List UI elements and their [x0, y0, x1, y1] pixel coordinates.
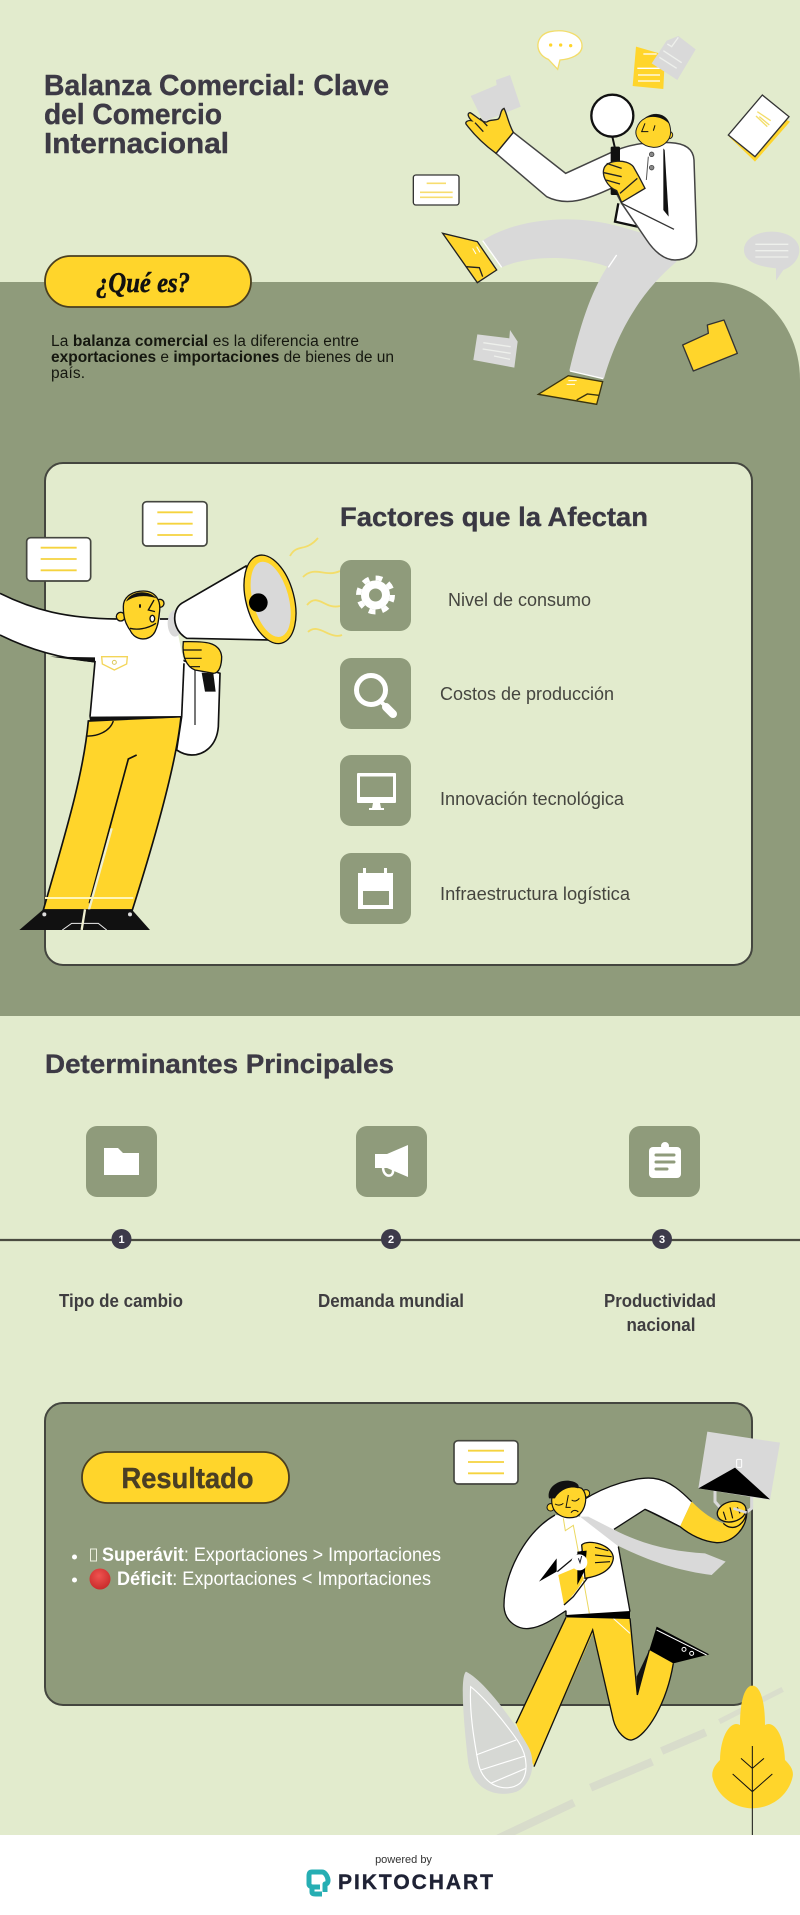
label: infraestructura: Infraestructura logística [440, 884, 631, 904]
label: costos: Costos de producción [440, 684, 614, 704]
timeline line [0, 1239, 800, 1241]
notes yellow and grey [633, 36, 696, 89]
grey shoe [463, 1672, 532, 1794]
background band [0, 282, 800, 1016]
message card [454, 1441, 518, 1484]
title: del Comercio [44, 99, 222, 131]
marker 2: 2 [388, 1234, 394, 1246]
grey speech bubble [744, 232, 799, 281]
marker 1 [112, 1229, 132, 1249]
sleeve [177, 660, 220, 755]
tie [580, 1517, 726, 1575]
forearm and watch [539, 1542, 613, 1605]
heading: determinantes: Determinantes Principales [45, 1049, 394, 1079]
illustration: man with magnifying glass [413, 31, 799, 404]
shirt pocket [102, 657, 127, 670]
panel: resultado [45, 1403, 752, 1705]
label: innovacion: Innovación tecnológica [440, 789, 625, 809]
definition text: La balanza comercial es la diferencia entre [51, 333, 359, 350]
icon: magnifier [340, 658, 411, 729]
megaphone [168, 549, 305, 649]
bullet: superavit: Superávit: Exportaciones > Importaciones [102, 1545, 441, 1566]
yellow folder [683, 320, 737, 371]
icon: folder [86, 1126, 157, 1197]
illustration: man with megaphone [0, 502, 305, 930]
label 3 [604, 1291, 716, 1335]
magnifying glass [591, 95, 633, 195]
black shoe [649, 1627, 709, 1663]
raised hand [466, 108, 513, 153]
head [636, 114, 673, 147]
pants [43, 717, 181, 930]
front shoe [538, 376, 603, 404]
illustration: running man [454, 1432, 793, 1838]
title: Internacional [44, 128, 229, 160]
heading: factores: Factores que la Afectan [340, 502, 648, 532]
icon: megaphone [356, 1126, 427, 1197]
label 3: Productividad [604, 1291, 716, 1311]
footer [0, 1835, 800, 1915]
logo wordmark: PIKTOCHART [338, 1871, 493, 1894]
shirt and arms [496, 132, 697, 260]
message card right [143, 502, 207, 546]
icon: calendar [340, 853, 411, 924]
powered by: powered by [375, 1854, 432, 1866]
shirt and arms [504, 1478, 692, 1629]
button: que es: ¿Qué es? [96, 267, 190, 299]
megaphone hand [183, 642, 222, 692]
head [116, 591, 164, 639]
grey folder [471, 75, 521, 122]
small message card [413, 175, 459, 205]
speech bubble yellow [538, 31, 582, 69]
panel: factores [45, 463, 752, 965]
button: que es [45, 256, 251, 307]
shirt and arm [0, 593, 184, 721]
legs [483, 219, 677, 379]
shoes [19, 909, 150, 930]
belt [566, 1611, 630, 1619]
button: resultado: Resultado [122, 1463, 254, 1495]
legs [516, 1617, 673, 1767]
grey document [473, 330, 518, 368]
determinant: tipo de cambio [59, 1126, 183, 1311]
determinant: productividad nacional [604, 1126, 716, 1335]
determinant: demanda mundial [318, 1126, 464, 1311]
definition text [51, 333, 394, 382]
marker 3: 3 [659, 1234, 665, 1246]
back shoe [443, 233, 497, 283]
marker 1: 1 [118, 1234, 125, 1246]
title [44, 70, 389, 160]
icon: clipboard [629, 1126, 700, 1197]
road dashes [498, 1689, 783, 1838]
head [547, 1481, 590, 1518]
yellow forearm and hand [645, 1498, 748, 1543]
briefcase [698, 1432, 780, 1513]
tree [712, 1686, 793, 1835]
definition text: país. [51, 365, 85, 382]
label 1: Tipo de cambio [59, 1291, 183, 1311]
shirt placket [563, 1518, 589, 1613]
icon: monitor [340, 755, 411, 826]
title: Balanza Comercial: Clave [44, 70, 389, 102]
message card left [27, 538, 91, 581]
marker 3 [652, 1229, 672, 1249]
label 2: Demanda mundial [318, 1291, 464, 1311]
bullet: deficit: Déficit: Exportaciones < Importaciones [117, 1569, 431, 1590]
logo mark [309, 1872, 328, 1894]
sound waves [290, 538, 342, 636]
button: resultado [82, 1452, 289, 1503]
definition text: exportaciones e importaciones de bienes de un [51, 349, 394, 366]
label: nivel de consumo: Nivel de consumo [448, 590, 591, 610]
label 3: nacional [626, 1315, 696, 1335]
hand holding glass [603, 161, 645, 202]
marker 2 [381, 1229, 401, 1249]
white document card [728, 95, 790, 162]
icon: gear [340, 560, 411, 631]
